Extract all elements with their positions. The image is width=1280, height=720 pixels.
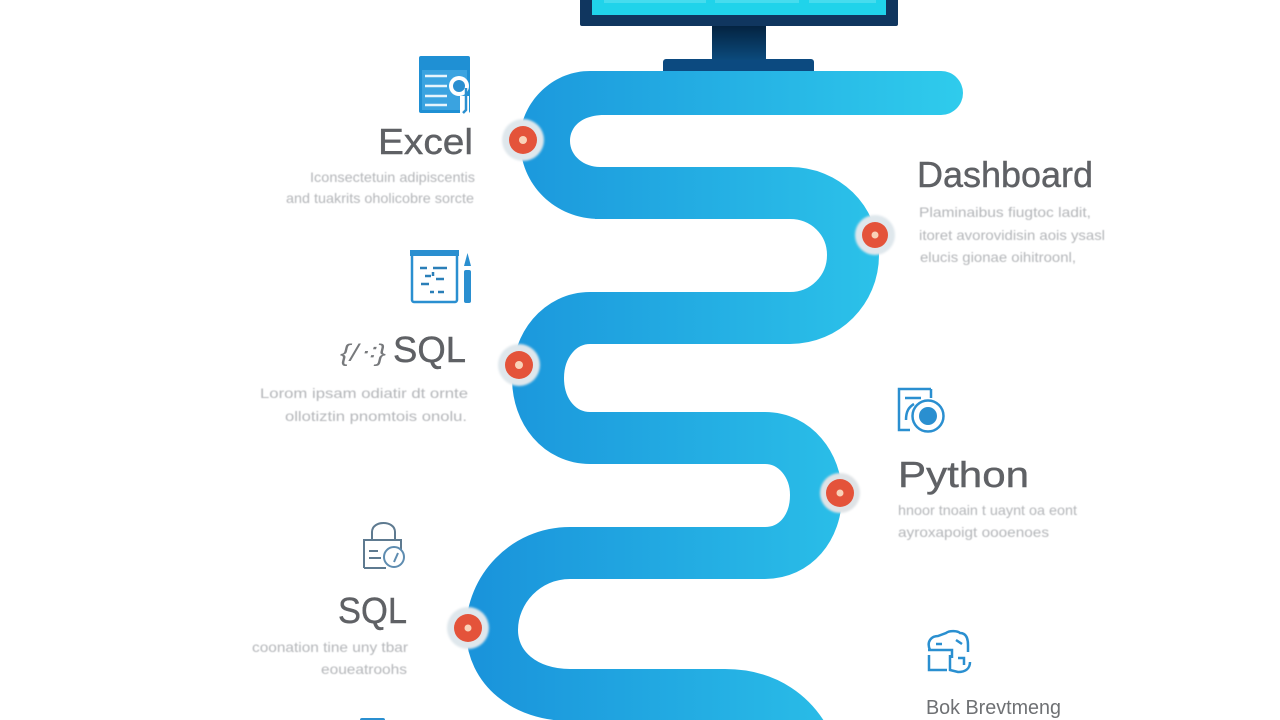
text block: SQL lower description <box>252 639 408 677</box>
text block: Excel description: Iconsectetuin adipiscentis <box>310 169 475 185</box>
marker: SQL lower <box>447 607 489 649</box>
heading: SQL with code glyph: SQL <box>393 329 466 370</box>
winding path <box>492 71 963 720</box>
marker: Python <box>820 473 860 513</box>
text block: Excel description: and tuakrits oholicobre sorcte <box>286 190 474 206</box>
marker: Dashboard <box>855 215 895 255</box>
text block: Dashboard description: elucis gionae oihitroonl, <box>920 249 1076 265</box>
heading: SQL with code glyph: {/⁖} <box>340 340 386 367</box>
text block: Python description <box>898 502 1077 540</box>
panel: Python <box>820 389 1077 540</box>
text block: Dashboard description: Plaminaibus fiugtoc ladit, <box>919 204 1091 220</box>
text block: Python description: hnoor tnoain t uaynt oa eont <box>898 502 1077 518</box>
text block: SQL lower description: coonation tine uny tbar <box>252 639 408 655</box>
marker: Excel <box>502 119 544 161</box>
icon: document with badge <box>899 389 944 432</box>
text block: SQL description <box>260 385 468 424</box>
heading: SQL: SQL <box>338 590 407 631</box>
panel: SQL lower <box>252 523 489 720</box>
icon: spreadsheet with key <box>419 56 470 114</box>
text block: Python description: ayroxapoigt oooenoes <box>898 524 1049 540</box>
heading: Book Brewing: Bok Brevtmeng <box>926 697 1061 719</box>
panel: Book Brewing <box>926 631 1061 719</box>
text block: Dashboard description <box>919 204 1105 265</box>
text block: SQL description: ollotiztin pnomtois onolu. <box>285 408 467 424</box>
panel: SQL upper <box>260 250 540 424</box>
icon: code window with pen <box>410 250 471 303</box>
text block: Dashboard description: itoret avorovidisin aois ysasl <box>919 227 1105 243</box>
panel: Excel <box>286 56 544 206</box>
text block: SQL description: Lorom ipsam odiatir dt ornte <box>260 385 468 401</box>
heading: Dashboard: Dashboard <box>917 154 1093 195</box>
text block: SQL lower description: eoueatroohs <box>321 661 407 677</box>
icon: partial cut-off <box>360 718 385 720</box>
heading: Python: Python <box>898 454 1029 495</box>
icon: database lock <box>364 523 404 568</box>
heading: SQL with code glyph <box>340 329 466 370</box>
icon: box with cloud <box>928 631 970 672</box>
text block: Excel description <box>286 169 475 206</box>
heading: Excel: Excel <box>378 121 473 162</box>
monitor <box>580 0 898 75</box>
panel: Dashboard <box>855 154 1105 265</box>
marker: SQL upper <box>498 344 540 386</box>
